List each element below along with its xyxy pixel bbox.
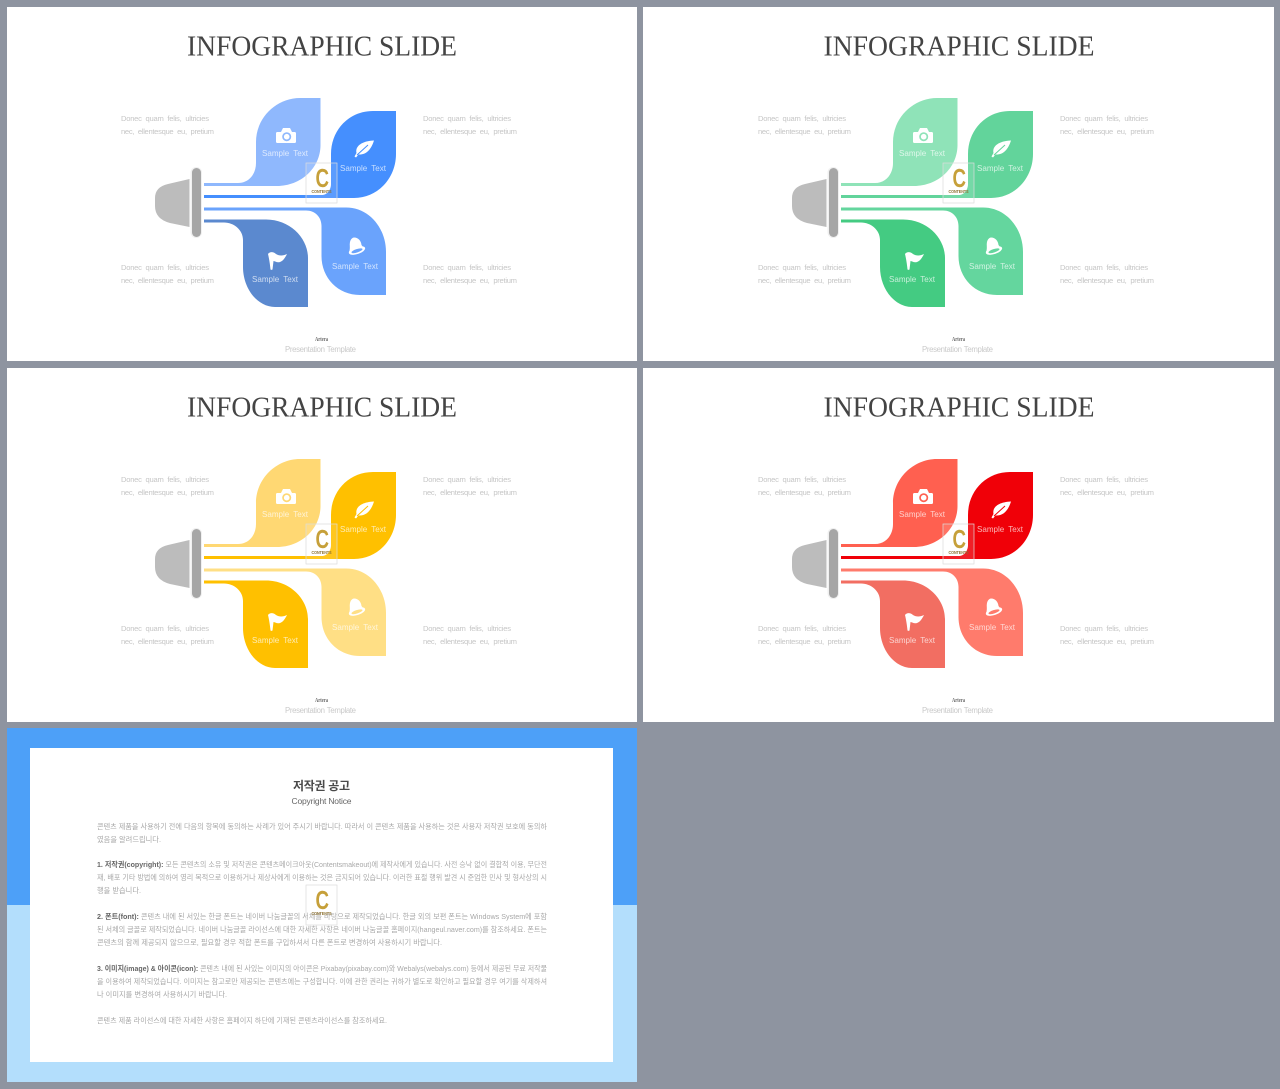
watermark: CONTENTS — [948, 189, 968, 194]
text block: top right: nec, ellentesque eu, pretium — [1060, 127, 1154, 136]
text block: top right: Donec quam felis, ultricies — [423, 475, 511, 484]
leaf: plant — [841, 472, 1033, 559]
leaf: flag: Sample Text — [889, 635, 936, 645]
leaf: bell — [204, 208, 386, 295]
text block: top left: Donec quam felis, ultricies — [121, 114, 209, 123]
text block: bottom right: Donec quam felis, ultricies — [423, 624, 511, 633]
text block: introduction: 콘텐츠 제품을 사용하기 전에 다음의 항목에 동의하는 사례가 있어 주시기 바랍니다. 따라서 이 콘텐츠 제품을 사용하는 것은 사용자 저작권 보호에 동의하 — [97, 821, 547, 831]
text block: image and icon: 나 이미지를 변경하여 사용하시기 바랍니다. — [97, 989, 227, 999]
text block: bottom left: nec, ellentesque eu, pretium — [758, 637, 851, 646]
leaf: bell: Sample Text — [969, 261, 1016, 271]
icon: megaphone — [155, 167, 202, 238]
text block: top right: nec, ellentesque eu, pretium — [423, 488, 517, 497]
watermark: C — [952, 163, 966, 193]
title: INFOGRAPHIC SLIDE — [187, 393, 457, 424]
footer: Artera — [952, 337, 965, 343]
footer — [285, 337, 356, 354]
text block: top right — [423, 114, 517, 136]
text block: top right: Donec quam felis, ultricies — [1060, 114, 1148, 123]
watermark — [306, 524, 337, 564]
leaf: flag: Sample Text — [252, 635, 299, 645]
text block: introduction — [97, 821, 547, 844]
panel: red infographic slide — [643, 368, 1274, 722]
footer: Presentation Template — [922, 345, 993, 354]
text block: top left: Donec quam felis, ultricies — [758, 475, 846, 484]
watermark: C — [316, 163, 329, 193]
text block: top right: Donec quam felis, ultricies — [423, 114, 511, 123]
footer: Presentation Template — [285, 706, 356, 715]
icon: megaphone — [792, 528, 839, 599]
leaf: bell: Sample Text — [332, 622, 379, 632]
heading: copyright notice: 저작권 공고 — [293, 778, 350, 793]
text block: bottom left: Donec quam felis, ultricies — [758, 263, 846, 272]
title: INFOGRAPHIC SLIDE — [187, 32, 457, 63]
leaf: bell — [841, 568, 1023, 656]
text block: bottom left — [121, 624, 214, 646]
panel: copyright notice — [7, 728, 637, 1082]
leaf: camera — [841, 98, 958, 186]
leaf: flag — [204, 580, 308, 668]
leaf: flag — [841, 220, 945, 307]
leaf: plant: Sample Text — [977, 163, 1024, 173]
text block: top left — [758, 475, 851, 497]
text block: bottom right: Donec quam felis, ultricies — [423, 263, 511, 272]
text block: top left: nec, ellentesque eu, pretium — [758, 127, 851, 136]
text block: bottom right: nec, ellentesque eu, pretium — [423, 276, 517, 285]
text block: top left: nec, ellentesque eu, pretium — [758, 488, 851, 497]
text block: top left: nec, ellentesque eu, pretium — [121, 127, 214, 136]
leaf: bell: Sample Text — [332, 261, 379, 271]
leaf: bell — [841, 208, 1023, 295]
text block: font: 된 서체의 글꼴로 제작되었습니다. 네이버 나눔글꼴 라이선스에 대한 자세한 사항은 네이버 나눔글꼴 홈페이지(hangeul.naver.com)를 참조하세요. 폰트는 — [97, 924, 547, 934]
text block: bottom left — [758, 263, 851, 285]
watermark: CONTENTS — [312, 550, 332, 555]
text block: bottom left — [758, 624, 851, 646]
text block: bottom right: nec, ellentesque eu, pretium — [1060, 276, 1154, 285]
leaf: camera: Sample Text — [899, 148, 946, 158]
text block: font: 콘텐츠의 함께 제공되지 않으므로, 필요할 경우 적합 폰트를 구입하셔서 다른 폰트로 변경하여 사용하시기 바랍니다. — [97, 937, 442, 947]
text block: introduction: 였음을 알려드립니다. — [97, 834, 161, 844]
watermark — [943, 524, 974, 564]
text block: copyright — [97, 859, 547, 895]
text block: bottom left: nec, ellentesque eu, pretium — [121, 637, 214, 646]
text block: font: 2. 폰트(font): 콘텐츠 내에 된 서있는 한글 폰트는 네이버 나눔글꼴의 서체를 바탕으로 제작되었습니다. 한글 외의 보편 폰트는 Windows System에 포함 — [97, 911, 547, 921]
text block: bottom right: nec, ellentesque eu, pretium — [1060, 637, 1154, 646]
text block: top right: Donec quam felis, ultricies — [1060, 475, 1148, 484]
leaf: plant: Sample Text — [340, 163, 387, 173]
watermark: C — [952, 524, 966, 554]
footer — [922, 337, 993, 354]
footer: Presentation Template — [922, 706, 993, 715]
text block: top left — [121, 475, 214, 497]
heading: copyright notice: Copyright Notice — [292, 796, 352, 806]
text block: image and icon — [97, 963, 547, 999]
leaf: camera: Sample Text — [262, 148, 309, 158]
leaf: camera — [204, 459, 320, 547]
text block: bottom right — [1060, 624, 1154, 646]
text block: license: 콘텐츠 제품 라이선스에 대한 자세한 사항은 홈페이지 하단에 기재된 콘텐츠라이선스를 참조하세요. — [97, 1015, 387, 1025]
leaf: flag — [841, 580, 945, 668]
text block: bottom left: nec, ellentesque eu, pretium — [121, 276, 214, 285]
footer: Artera — [952, 698, 965, 704]
leaf: plant: Sample Text — [977, 524, 1024, 534]
footer: Artera — [315, 337, 328, 343]
leaf: flag: Sample Text — [889, 274, 936, 284]
watermark: CONTENTS — [312, 911, 332, 916]
title: INFOGRAPHIC SLIDE — [824, 393, 1094, 424]
text block: bottom left: Donec quam felis, ultricies — [758, 624, 846, 633]
text block: bottom left: Donec quam felis, ultricies — [121, 263, 209, 272]
text block: top right: nec, ellentesque eu, pretium — [423, 127, 517, 136]
icon: megaphone — [792, 167, 839, 238]
watermark: CONTENTS — [312, 189, 332, 194]
text block: bottom left: nec, ellentesque eu, pretium — [758, 276, 851, 285]
text block: top right — [423, 475, 517, 497]
text block: bottom right: nec, ellentesque eu, pretium — [423, 637, 517, 646]
watermark — [306, 163, 337, 203]
text block: copyright: 재, 배포 기타 방법에 의하여 영리 목적으로 이용하거나 제상사에게 이용하는 것은 금지되어 있습니다. 이러한 표절 행위 발견 시 준엄한 민사 및 형사상의 시 — [97, 872, 547, 882]
text block: top left: nec, ellentesque eu, pretium — [121, 488, 214, 497]
text block: copyright: 1. 저작권(copyright): 모든 콘텐츠의 소유 및 저작권은 콘텐츠메이크아웃(Contentsmakeout)에 제작사에게 있습니다. 사전 승낙 없이 결합적 이용, 무단전 — [97, 859, 547, 869]
text block: image and icon: 을 이용하여 제작되었습니다. 이미지는 참고로만 제공되는 콘텐츠에는 구성합니다. 이에 관한 권리는 귀하가 별도로 확인하고 필요할 경우 여기를 삭제하셔 — [97, 976, 547, 986]
text block: copyright: 행을 받습니다. — [97, 885, 141, 895]
panel: blue infographic slide — [7, 7, 637, 361]
text block: bottom right — [423, 263, 517, 285]
leaf: camera: Sample Text — [899, 509, 946, 519]
leaf: bell: Sample Text — [969, 622, 1016, 632]
leaf: plant — [841, 111, 1033, 198]
footer: Presentation Template — [285, 345, 356, 354]
text block: image and icon: 3. 이미지(image) & 아이콘(icon): 콘텐츠 내에 된 사있는 이미지의 아이콘은 Pixabay(pixabay.com)와 Webalys(webalys.com) 등에서 제공된 무료 저작물 — [97, 963, 547, 973]
panel: yellow infographic slide — [7, 368, 637, 722]
leaf: plant — [204, 472, 396, 559]
text block: top left — [121, 114, 214, 136]
leaf: bell — [204, 568, 386, 656]
leaf: plant — [204, 111, 396, 198]
watermark — [943, 163, 974, 203]
leaf: flag — [204, 220, 308, 307]
text block: top right — [1060, 114, 1154, 136]
text block: top right: nec, ellentesque eu, pretium — [1060, 488, 1154, 497]
watermark: C — [316, 885, 329, 915]
footer: Artera — [315, 698, 328, 704]
text block: bottom right: Donec quam felis, ultricies — [1060, 624, 1148, 633]
leaf: camera — [841, 459, 958, 547]
icon: megaphone — [155, 528, 202, 599]
text block: top left — [758, 114, 851, 136]
text block: top left: Donec quam felis, ultricies — [758, 114, 846, 123]
text block: top left: Donec quam felis, ultricies — [121, 475, 209, 484]
watermark — [306, 885, 337, 925]
text block: bottom left — [121, 263, 214, 285]
leaf: plant: Sample Text — [340, 524, 387, 534]
text block: bottom right: Donec quam felis, ultricies — [1060, 263, 1148, 272]
text block: top right — [1060, 475, 1154, 497]
leaf: camera: Sample Text — [262, 509, 309, 519]
text block: bottom left: Donec quam felis, ultricies — [121, 624, 209, 633]
leaf: camera — [204, 98, 320, 186]
leaf: flag: Sample Text — [252, 274, 299, 284]
panel: green infographic slide — [643, 7, 1274, 361]
footer — [285, 698, 356, 715]
text block: font — [97, 911, 547, 947]
heading: copyright notice — [292, 778, 352, 806]
text block: bottom right — [1060, 263, 1154, 285]
watermark: CONTENTS — [948, 550, 968, 555]
title: INFOGRAPHIC SLIDE — [824, 32, 1094, 63]
footer — [922, 698, 993, 715]
text block: bottom right — [423, 624, 517, 646]
watermark: C — [316, 524, 329, 554]
